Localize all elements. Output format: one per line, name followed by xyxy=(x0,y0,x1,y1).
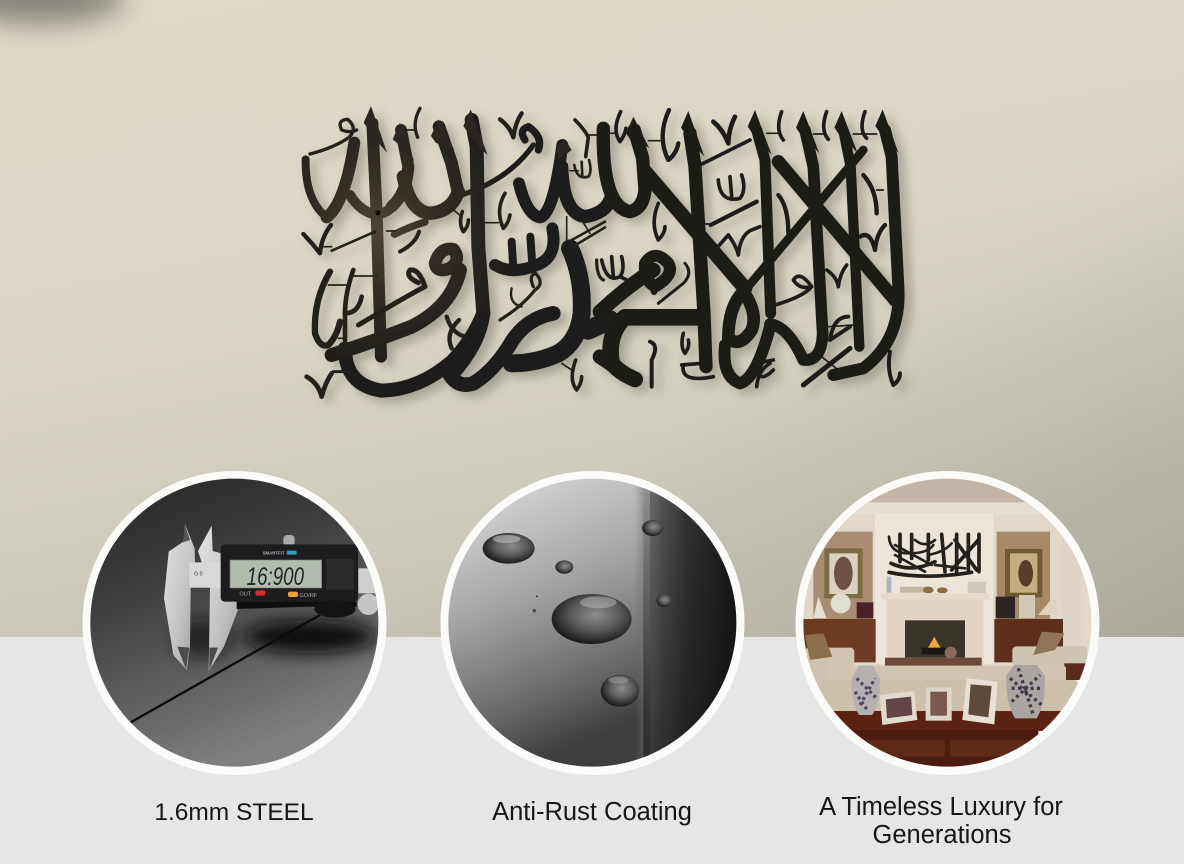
wall xyxy=(802,514,1095,680)
calligraphy: right half xyxy=(600,109,900,387)
feature: luxury living room xyxy=(796,471,1100,849)
photo: digital caliper on brushed steel: G 0 xyxy=(194,572,203,578)
ginger jars xyxy=(851,666,880,715)
white ring xyxy=(82,471,386,775)
spear tips xyxy=(364,106,572,162)
feature: anti-rust coating xyxy=(440,471,744,826)
caliper ruler xyxy=(189,562,223,588)
fine strokes and marks xyxy=(303,108,605,397)
thick strokes xyxy=(600,128,899,383)
thumb screw xyxy=(283,535,295,544)
LCD display xyxy=(230,560,322,588)
sofa xyxy=(810,666,828,684)
caption: A Timeless Luxury for xyxy=(819,793,1063,821)
caliper jaws xyxy=(164,524,195,670)
mantel ornaments xyxy=(887,577,891,593)
spear tips xyxy=(626,109,899,195)
mini calligraphy xyxy=(889,534,979,576)
photo: living room with calligraphy over fireplace xyxy=(802,475,1095,770)
fine strokes and marks xyxy=(602,110,900,387)
white ring xyxy=(440,471,744,775)
caption: Anti-Rust Coating xyxy=(492,798,692,826)
photo: digital caliper on brushed steel xyxy=(83,475,383,772)
brand label: SMARTFIT xyxy=(263,550,285,555)
wall shading on right xyxy=(0,0,1184,637)
LCD reading: 16:900 xyxy=(247,563,304,591)
calligraphy wall art xyxy=(303,106,900,397)
cabinets xyxy=(803,619,876,662)
firebox xyxy=(905,620,965,658)
photo: digital caliper on brushed steel: GO/RF xyxy=(299,593,318,599)
background: light grey floor band xyxy=(0,637,1184,864)
caption second line: Generations xyxy=(873,821,1011,849)
ceiling xyxy=(864,478,1030,505)
photo frames xyxy=(880,691,917,725)
dark smudge in top-left corner xyxy=(0,0,125,24)
thick strokes xyxy=(306,120,610,391)
calligraphy: left half xyxy=(303,106,610,397)
shadow under caliper xyxy=(243,620,377,653)
console table xyxy=(834,711,1061,731)
droplets xyxy=(483,533,535,564)
armchairs xyxy=(805,648,854,671)
fireplace surround xyxy=(881,593,989,599)
white ring xyxy=(796,471,1100,775)
buttons and button labels xyxy=(326,559,354,590)
framed paintings xyxy=(824,548,863,598)
caption: 1.6mm STEEL xyxy=(154,799,314,826)
photo: digital caliper on brushed steel: OUT xyxy=(239,591,252,597)
feature: steel thickness xyxy=(82,471,386,826)
steel sheet edge xyxy=(131,615,320,722)
thumb wheel xyxy=(314,600,356,618)
coffee table items xyxy=(885,658,982,666)
left and right niches xyxy=(813,532,873,619)
mounting hole xyxy=(375,210,381,215)
fire xyxy=(928,637,941,648)
photo: water droplets on coated metal xyxy=(447,475,743,772)
shelf decor xyxy=(813,597,827,618)
background: beige wall xyxy=(0,0,1184,637)
caliper body xyxy=(221,544,358,602)
